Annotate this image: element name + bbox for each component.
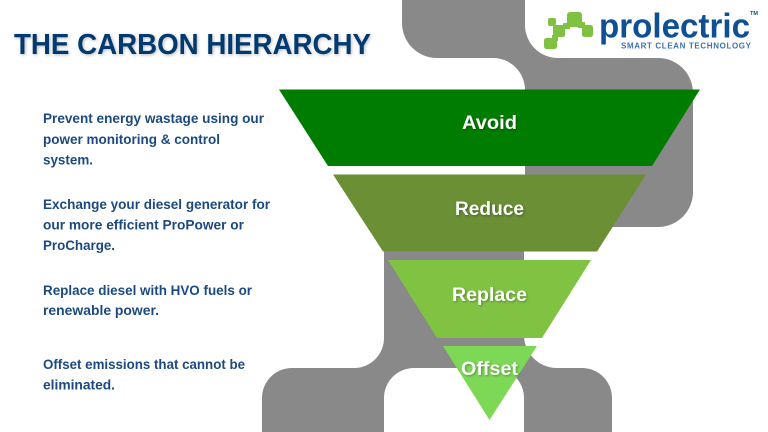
funnel tier: avoid [279, 90, 700, 166]
logo trademark: TM [750, 11, 758, 17]
text block: reduce description [43, 196, 271, 253]
text block: avoid description: system. [43, 152, 93, 168]
funnel tier: replace [388, 260, 591, 338]
funnel tier: replace: Replace [452, 285, 527, 306]
funnel tier: reduce: Reduce [455, 199, 524, 220]
icon: green pixel mark [544, 12, 593, 49]
chart: inverted funnel [279, 90, 700, 420]
text block: reduce description: Exchange your diesel generator for [43, 196, 271, 212]
grey background ribbon shape [262, 0, 693, 432]
funnel tier: avoid: Avoid [462, 113, 517, 134]
text block: replace description: renewable power. [43, 302, 159, 318]
logo: prolectric [544, 8, 758, 50]
text block: replace description [43, 282, 253, 318]
text block: reduce description: our more efficient ProPower or [43, 216, 245, 232]
text block: reduce description: ProCharge. [43, 237, 115, 253]
funnel tier: offset [443, 346, 537, 420]
text block: avoid description: power monitoring & control [43, 131, 220, 147]
text block: avoid description [43, 110, 265, 168]
logo tagline: SMART CLEAN TECHNOLOGY [621, 42, 752, 50]
text block: avoid description: Prevent energy wastage using our [43, 110, 265, 126]
text block: replace description: Replace diesel with HVO fuels or [43, 282, 253, 298]
funnel tier: offset: Offset [461, 359, 519, 380]
funnel tier: reduce [333, 174, 646, 252]
panel: descriptions [43, 110, 271, 392]
logo wordmark: prolectric [599, 8, 750, 46]
title: THE CARBON HIERARCHY [14, 29, 371, 61]
text block: offset description: Offset emissions that cannot be [43, 356, 245, 372]
text block: offset description: eliminated. [43, 376, 115, 392]
text block: offset description [43, 356, 245, 392]
